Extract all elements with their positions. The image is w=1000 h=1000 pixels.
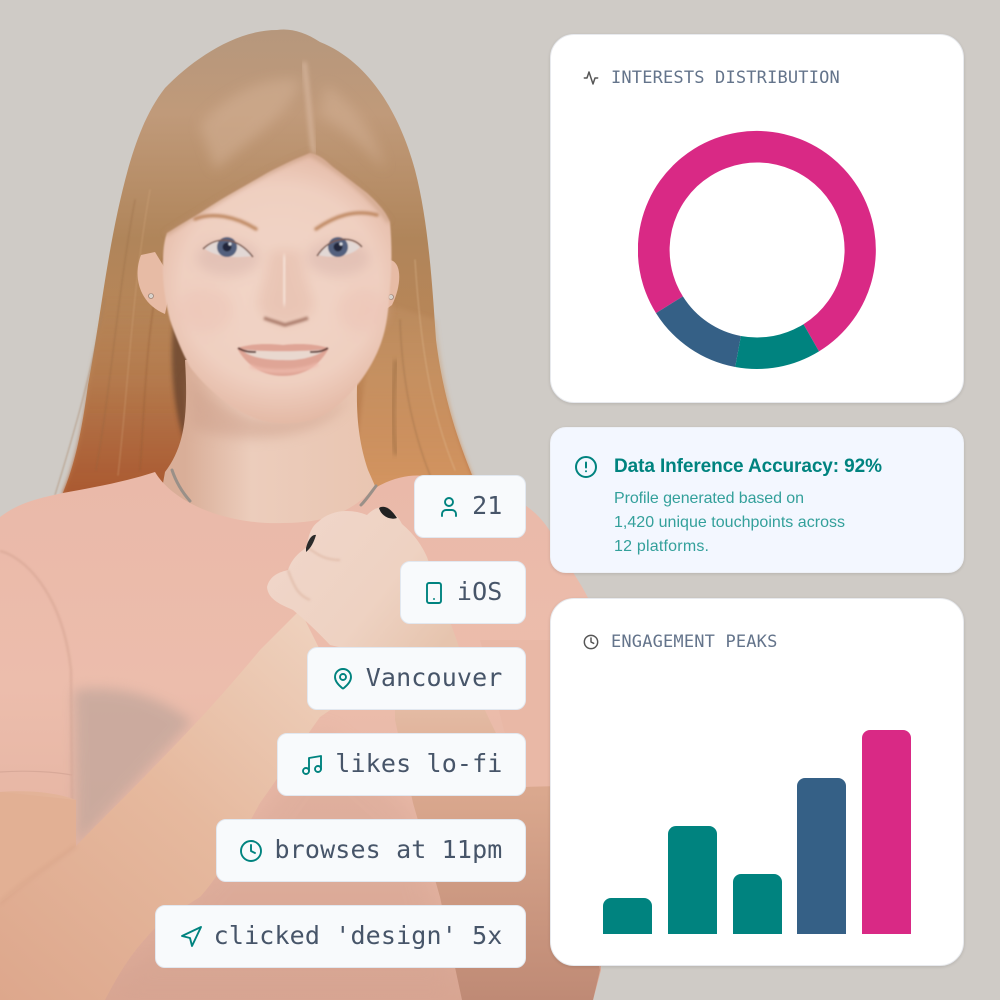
bar chart [603, 730, 911, 934]
shirt [0, 472, 601, 1000]
left arm forearm [0, 610, 345, 1000]
chin shadow [190, 375, 352, 438]
eye sockets [196, 240, 260, 276]
earrings [148, 294, 394, 300]
bar 2 [668, 826, 717, 934]
icon: music note [302, 755, 322, 775]
icon: clock [240, 840, 262, 862]
hair [55, 30, 480, 495]
bar 1 [603, 898, 652, 934]
heading: interests distribution: INTERESTS DISTRIBUTION [611, 68, 840, 88]
icon: navigation arrow [181, 926, 202, 947]
panel: interests distribution [550, 34, 964, 403]
sleeve crease [0, 551, 72, 800]
eye left [203, 237, 253, 257]
tag: location [307, 647, 526, 710]
right sleeve [480, 640, 600, 787]
cheeks [177, 288, 233, 332]
tag: music: likes lo-fi [335, 749, 502, 778]
lower shirt shade [100, 730, 460, 1000]
icon: tablet [426, 582, 442, 604]
bar 5 [862, 730, 911, 934]
icon: map pin [334, 668, 352, 690]
tag: clicks: clicked 'design' 5x [214, 921, 502, 950]
tag: device: iOS [457, 577, 502, 606]
tag: age: 21 [472, 491, 502, 520]
right arm [395, 640, 600, 1000]
nails [379, 507, 397, 519]
tag: location: Vancouver [366, 663, 502, 692]
callout body: Profile generated based on [614, 490, 804, 507]
heading: engagement peaks: ENGAGEMENT PEAKS [611, 632, 777, 652]
bar 4 [797, 778, 846, 934]
icon: user [441, 497, 457, 517]
tag: clicks [155, 905, 526, 968]
callout body: 12 platforms. [614, 538, 709, 555]
tag: browsing time [216, 819, 526, 882]
hand [267, 507, 460, 660]
panel: engagement peaks [550, 598, 964, 966]
shirt underarm shadow [74, 689, 192, 846]
icon: clock [584, 634, 598, 650]
callout body [614, 490, 845, 555]
tag: age [414, 475, 526, 538]
icon: alert circle [575, 456, 597, 478]
necklace [172, 470, 376, 505]
donut chart [638, 130, 876, 369]
mouth [237, 344, 329, 376]
callout text [614, 456, 882, 555]
bar 3 [733, 874, 782, 934]
panel: data inference accuracy callout [550, 427, 964, 573]
hairline shadow [165, 153, 390, 234]
segment: teal [735, 324, 819, 369]
face [163, 153, 392, 423]
sleeve hem [0, 771, 72, 775]
callout body: 1,420 unique touchpoints across [614, 514, 845, 531]
nose [258, 250, 314, 325]
icon: activity [584, 71, 598, 85]
tag: device [400, 561, 526, 624]
tag: music [277, 733, 526, 796]
ears [138, 252, 399, 314]
tag: browsing time: browses at 11pm [274, 835, 502, 864]
eyebrows [195, 213, 377, 229]
neck [160, 360, 390, 560]
eye right [317, 237, 362, 257]
segment: blue [656, 296, 741, 367]
segment: pink [638, 131, 876, 351]
callout heading: Data Inference Accuracy: 92% [614, 456, 882, 477]
